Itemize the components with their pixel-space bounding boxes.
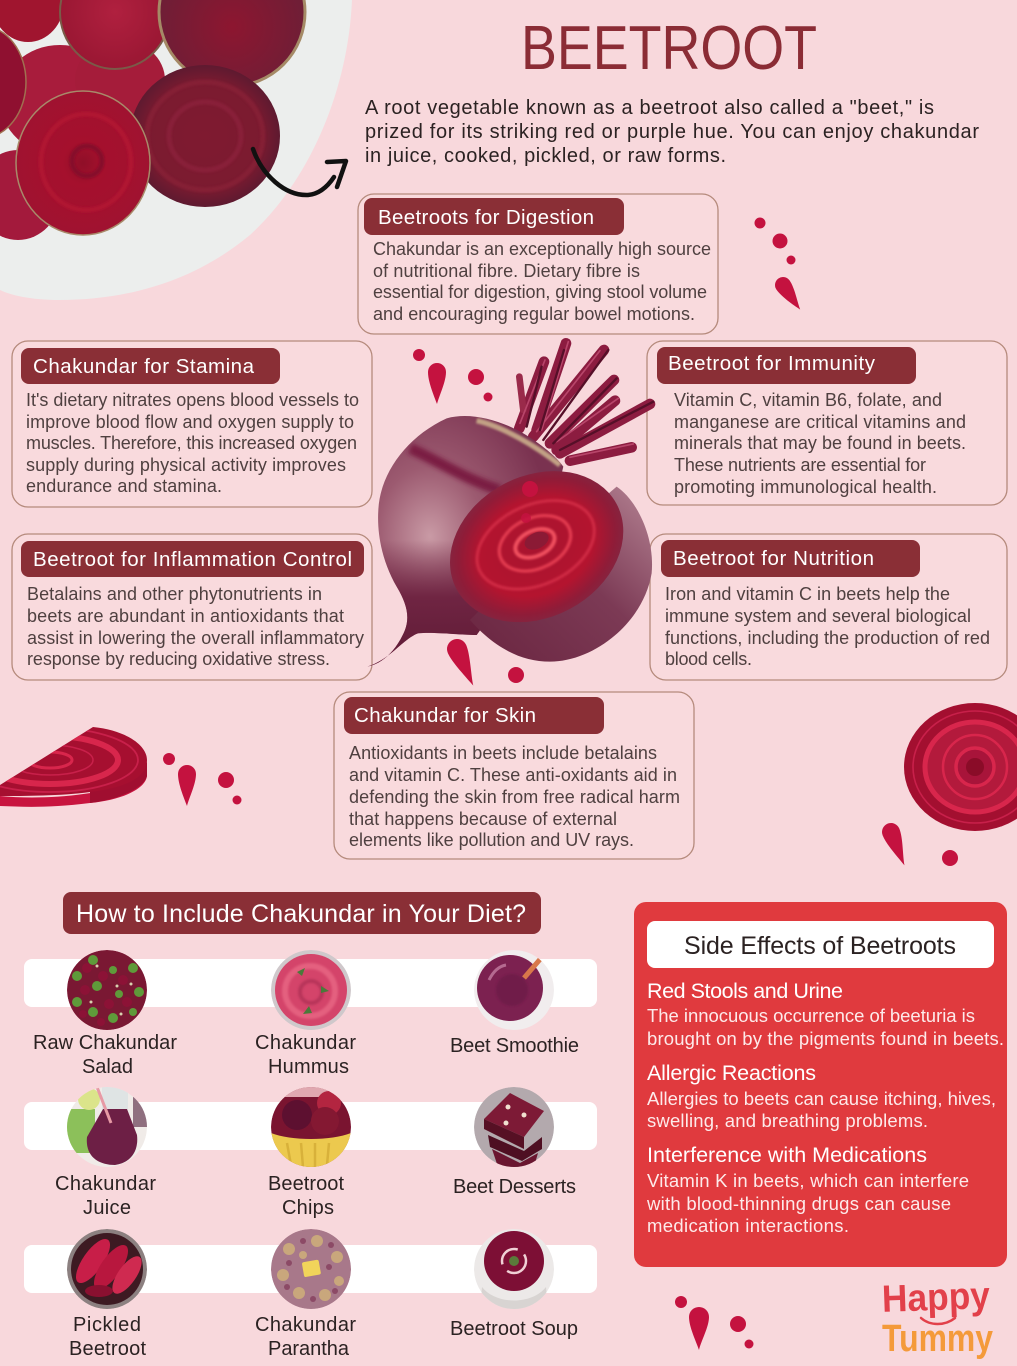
text: red stools and urine: [647, 979, 1004, 1049]
text: immunity: These nutrients are essential for: [674, 455, 926, 475]
image: halved beetroot: [360, 342, 653, 670]
heading: stamina: [21, 348, 280, 384]
logo: happy tummy: Happy: [881, 1275, 991, 1321]
text: interference with medications: [646, 1143, 969, 1236]
heading: inflammation: Beetroot for Inflammation Control: [33, 548, 352, 571]
item: beetroot soup: Beetroot Soup: [450, 1318, 578, 1340]
item: pickled beetroot: Pickled: [73, 1314, 141, 1336]
item: chakundar parantha: Chakundar: [255, 1314, 356, 1336]
image: plate of sliced beetroot: [0, 0, 352, 300]
text: nutrition: [665, 584, 990, 669]
text: interference with medications: with blood-thinning drugs can cause: [646, 1193, 951, 1214]
text: interference with medications: Interference with Medications: [647, 1143, 927, 1167]
logo: happy tummy: Tummy: [882, 1318, 993, 1360]
text: skin: [349, 743, 680, 850]
item: chakundar juice: Chakundar: [55, 1173, 156, 1195]
item: chakundar hummus: Hummus: [268, 1056, 349, 1078]
item: beetroot chips: [268, 1087, 351, 1219]
heading: immunity: Beetroot for Immunity: [668, 352, 876, 375]
illustration: round beet slice: [904, 703, 1017, 831]
title: BEETROOT: [521, 14, 817, 83]
text: red stools and urine: Red Stools and Urine: [647, 979, 843, 1003]
drops: bottom group: [675, 1296, 754, 1350]
item: chakundar juice: Juice: [83, 1197, 131, 1219]
heading: skin: [344, 697, 604, 734]
text: skin: Antioxidants in beets include betalains: [349, 743, 657, 763]
text: skin: that happens because of external: [349, 809, 617, 829]
root body: [367, 416, 563, 667]
text: skin: and vitamin C. These anti-oxidants aid in: [349, 765, 677, 785]
front half: [470, 487, 652, 662]
item: chakundar parantha: [255, 1229, 356, 1360]
item: chakundar parantha: Parantha: [268, 1338, 350, 1360]
text: interference with medications: Vitamin K in beets, which can interfere: [647, 1170, 969, 1191]
panel: chakundar for skin: [334, 692, 694, 859]
text: digestion: and encouraging regular bowel motions.: [373, 304, 695, 324]
item: chakundar hummus: [255, 950, 356, 1078]
drops: right group: [879, 820, 958, 869]
text: immunity: minerals that may be found in beets.: [674, 433, 966, 453]
text: allergic reactions: swelling, and breathing problems.: [647, 1110, 928, 1131]
text: immunity: Vitamin C, vitamin B6, folate, and: [674, 390, 942, 410]
text: digestion: Chakundar is an exceptionally high source: [373, 239, 711, 259]
panel: beetroot for immunity: [647, 341, 1007, 505]
intro text: A root vegetable known as a beetroot also called a "beet," is: [365, 97, 934, 119]
text: nutrition: immune system and several biological: [665, 606, 971, 626]
text: allergic reactions: Allergic Reactions: [647, 1061, 816, 1085]
text: allergic reactions: Allergies to beets can cause itching, hives,: [647, 1088, 996, 1109]
item: raw chakundar salad: Raw Chakundar: [33, 1032, 177, 1054]
text: inflammation: beets are abundant in antioxidants that: [27, 606, 344, 626]
drops: top right: [754, 218, 807, 314]
arrow: [253, 149, 346, 195]
text: allergic reactions: [647, 1061, 996, 1131]
panel: beetroots for digestion: [358, 194, 718, 334]
text: nutrition: Iron and vitamin C in beets help the: [665, 584, 950, 604]
panel: beetroot for nutrition: [650, 534, 1007, 680]
text: inflammation: response by reducing oxidative stress.: [27, 649, 330, 669]
heading: diet: [63, 892, 541, 934]
text: interference with medications: medication interactions.: [647, 1215, 849, 1236]
item: raw chakundar salad: Salad: [82, 1056, 133, 1078]
text: nutrition: functions, including the production of red: [665, 628, 990, 648]
text: stamina: muscles. Therefore, this increased oxygen: [26, 433, 357, 453]
text: inflammation: assist in lowering the overall inflammatory: [27, 628, 364, 648]
item: beet smoothie: Beet Smoothie: [450, 1035, 579, 1057]
text: immunity: [674, 390, 966, 497]
text: digestion: of nutritional fibre. Dietary fibre is: [373, 261, 640, 281]
text: immunity: manganese are critical vitamins and: [674, 412, 966, 432]
drops: around beetroot: [413, 349, 538, 690]
text: stamina: improve blood flow and oxygen supply to: [26, 412, 354, 432]
heading: inflammation: [21, 541, 364, 577]
text: skin: defending the skin from free radical harm: [349, 787, 680, 807]
text: nutrition: blood cells.: [665, 649, 752, 669]
panel: chakundar for stamina: [12, 341, 372, 507]
logo: happy tummy: [881, 1275, 993, 1360]
text: stamina: endurance and stamina.: [26, 476, 222, 496]
item: beetroot soup: [450, 1229, 578, 1340]
heading: nutrition: [661, 540, 920, 577]
text: stamina: [26, 390, 359, 496]
intro text: prized for its striking red or purple hue. You can enjoy chakundar: [365, 121, 979, 143]
item: beet desserts: [453, 1087, 576, 1198]
item: beet desserts: Beet Desserts: [453, 1176, 576, 1198]
item: pickled beetroot: Beetroot: [69, 1338, 146, 1360]
section: how to include in diet: [24, 892, 597, 1360]
text: immunity: promoting immunological health.: [674, 477, 937, 497]
item: raw chakundar salad: [33, 950, 177, 1078]
heading: digestion: Beetroots for Digestion: [378, 206, 594, 229]
text: skin: elements like pollution and UV rays.: [349, 830, 634, 850]
heading: side effects: [647, 921, 994, 968]
text: stamina: It's dietary nitrates opens blood vessels to: [26, 390, 359, 410]
text: inflammation: [27, 584, 364, 669]
heading: skin: Chakundar for Skin: [354, 704, 536, 727]
row bars: [24, 959, 597, 1293]
item: pickled beetroot: [67, 1229, 147, 1360]
item: chakundar juice: [55, 1087, 156, 1219]
item: beet smoothie: [450, 950, 579, 1057]
drops: left group: [163, 753, 242, 806]
heading: digestion: [364, 198, 624, 235]
panel: side effects of beetroots: [634, 902, 1007, 1267]
heading: immunity: [657, 347, 916, 384]
text: red stools and urine: brought on by the pigments found in beets.: [647, 1028, 1004, 1049]
heading: nutrition: Beetroot for Nutrition: [673, 547, 874, 570]
text: red stools and urine: The innocuous occurrence of beeturia is: [647, 1005, 975, 1026]
heading: diet: How to Include Chakundar in Your Diet?: [76, 900, 526, 928]
intro text: [365, 97, 979, 167]
panel: beetroot for inflammation control: [12, 534, 372, 680]
text: digestion: essential for digestion, giving stool volume: [373, 282, 707, 302]
intro text: in juice, cooked, pickled, or raw forms.: [365, 145, 726, 167]
text: stamina: supply during physical activity improves: [26, 455, 346, 475]
text: digestion: [373, 239, 711, 324]
illustration: half beet slice: [0, 727, 147, 807]
text: inflammation: Betalains and other phytonutrients in: [27, 584, 322, 604]
heading: stamina: Chakundar for Stamina: [33, 355, 255, 378]
heading: side effects: Side Effects of Beetroots: [684, 932, 956, 960]
item: beetroot chips: Beetroot: [268, 1173, 344, 1195]
item: chakundar hummus: Chakundar: [255, 1032, 356, 1054]
stems: [519, 342, 653, 461]
item: beetroot chips: Chips: [282, 1197, 334, 1219]
